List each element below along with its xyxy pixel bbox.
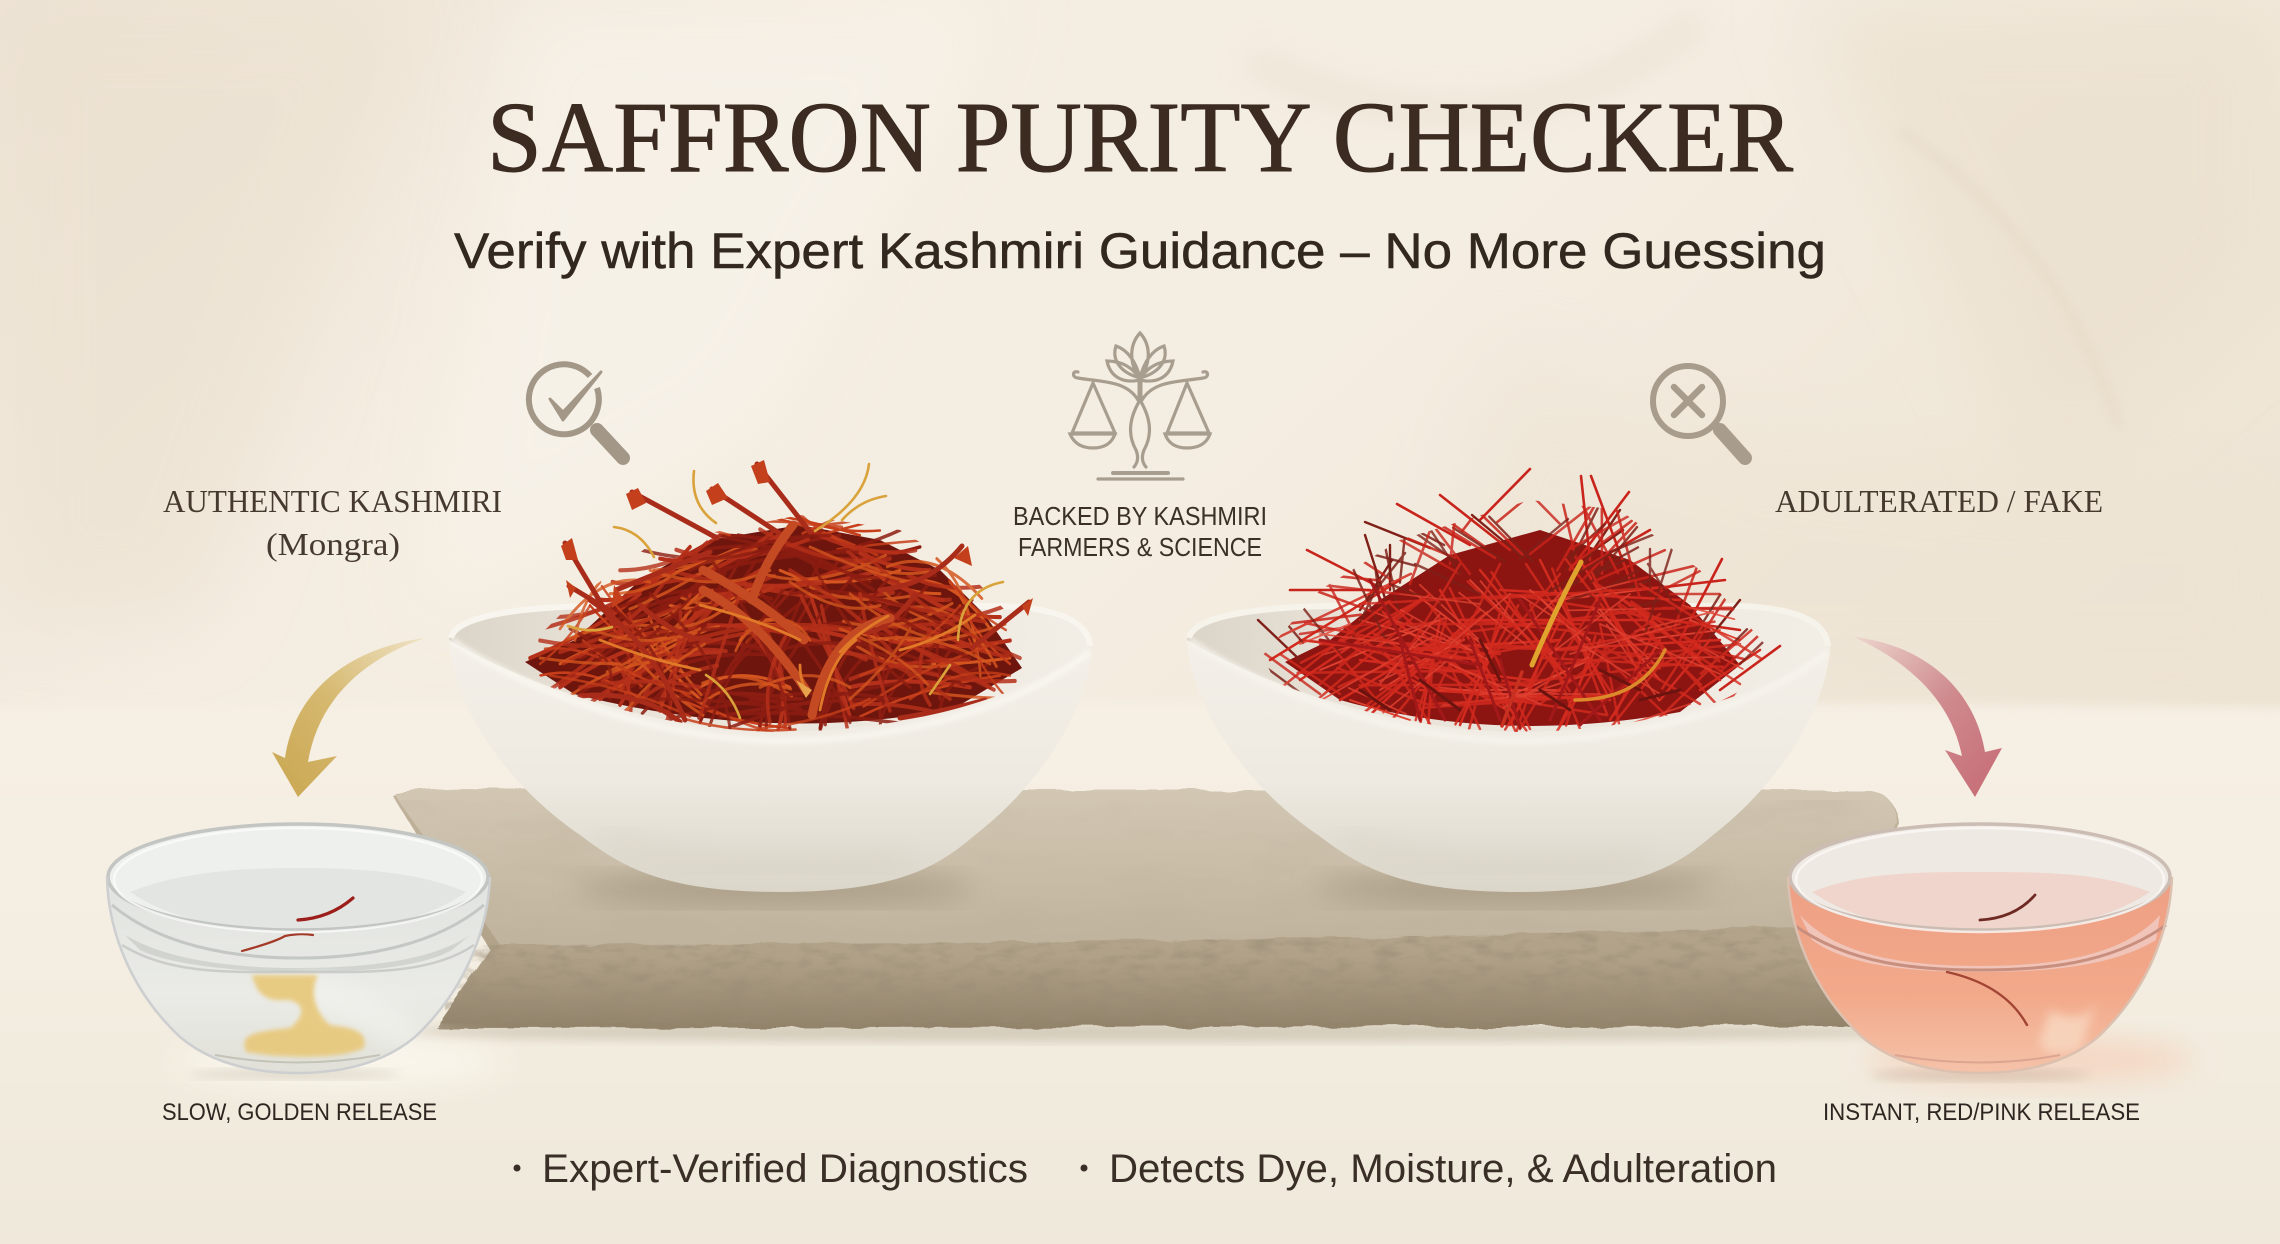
saffron threads: thin dyed [1256, 468, 1782, 732]
subtitle: Verify with Expert Kashmiri Guidance – No More Guessing [454, 223, 1826, 279]
saffron thread floating [298, 898, 353, 920]
bowl front [449, 640, 1092, 892]
label: authentic Kashmiri [163, 483, 502, 562]
icon: scales with saffron flower [1070, 333, 1210, 479]
bowl front [1187, 640, 1830, 892]
label: backed by farmers and science: FARMERS & SCIENCE [1018, 532, 1262, 562]
title: SAFFRON PURITY CHECKER [487, 81, 1794, 193]
arrow: pink, to instant release bowl [1854, 637, 2002, 797]
bowl interior [1187, 604, 1830, 732]
golden dye plume [244, 975, 365, 1057]
label: backed by farmers and science: BACKED BY KASHMIRI [1013, 501, 1267, 531]
glass bowl: pink water with instant release [1788, 824, 2195, 1084]
icon: magnifier with cross [1653, 366, 1745, 458]
glass bowl: clear water with golden release [107, 824, 500, 1086]
label: backed by farmers and science [1013, 501, 1267, 562]
bullet: detects dye, moisture and adulteration: Detects Dye, Moisture, & Adulteration [1109, 1147, 1777, 1191]
label: adulterated or fake: ADULTERATED / FAKE [1775, 483, 2103, 519]
caption: instant red or pink release: INSTANT, RED/PINK RELEASE [1823, 1099, 2140, 1126]
saffron thread lower [242, 934, 313, 951]
saffron thread floating [1980, 895, 2035, 920]
caption: slow golden release: SLOW, GOLDEN RELEASE [162, 1099, 437, 1126]
icon: magnifier with check mark [529, 364, 623, 458]
arrow: gold, to slow release bowl [272, 638, 425, 797]
stone slab [340, 789, 1940, 1042]
label: authentic Kashmiri: (Mongra) [266, 526, 400, 562]
white bowl with authentic saffron [449, 460, 1092, 902]
saffron threads: thick Mongra [525, 460, 1033, 732]
label: authentic Kashmiri: AUTHENTIC KASHMIRI [163, 483, 502, 519]
saffron thread lower [1947, 972, 2027, 1025]
white bowl with adulterated saffron [1187, 445, 1830, 902]
bowl interior [449, 604, 1092, 732]
bullet: expert-verified diagnostics: Expert-Verified Diagnostics [542, 1147, 1028, 1191]
